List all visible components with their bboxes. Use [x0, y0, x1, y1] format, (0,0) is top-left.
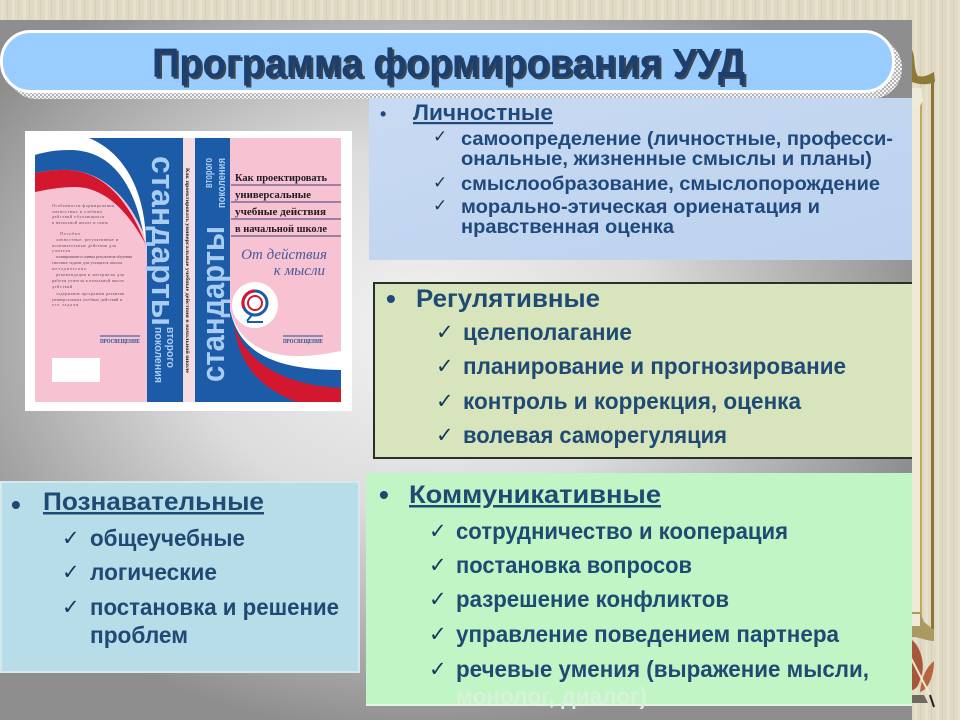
- panel: личностные: ✓: [433, 196, 447, 216]
- panel: регулятивные: •: [386, 283, 396, 314]
- front cover: универсальные: [235, 189, 311, 201]
- panel: познавательные: ✓: [62, 595, 80, 619]
- back cover: личностных и учебных: [52, 209, 102, 214]
- back cover: [35, 138, 147, 402]
- back cover: учителя: [52, 248, 70, 253]
- back cover: планирование и оценка результатов обучения: [56, 254, 132, 259]
- spines: поколения: [152, 327, 164, 383]
- icon: series logo: [232, 282, 278, 328]
- back cover: его задачи: [52, 302, 79, 307]
- spines: поколения: [216, 158, 228, 208]
- panel: регулятивные: волевая саморегуляция: [463, 422, 727, 448]
- panel: регулятивные: ✓: [436, 354, 454, 378]
- panel: познавательные: •: [11, 489, 21, 520]
- panel: регулятивные: целеполагание: [463, 319, 632, 345]
- back cover: Особенности формирования: [52, 203, 114, 208]
- book cover image: [25, 131, 352, 411]
- spines: Как проектировать универсальные учебные действия в начальной школе: [184, 168, 189, 374]
- back cover: типовые задачи для учащихся школы: [52, 260, 122, 265]
- panel: регулятивные: [373, 282, 912, 459]
- front cover: в начальной школе: [235, 223, 327, 235]
- panel: познавательные: Познавательные: [43, 488, 264, 516]
- panel: коммуникативные: постановка вопросов: [456, 552, 692, 578]
- back cover: универсальных учебных действий и: [52, 297, 123, 302]
- back cover: Пособие: [60, 231, 80, 236]
- spines: второго: [164, 327, 176, 368]
- panel: коммуникативные: разрешение конфликтов: [456, 586, 729, 612]
- panel: личностные: нравственная оценка: [461, 216, 674, 238]
- spines: второго: [203, 158, 215, 188]
- title: Программа формирования УУД: [154, 42, 747, 88]
- panel: регулятивные: Регулятивные: [416, 285, 600, 313]
- spines: стандарты: [195, 226, 231, 382]
- panel: личностные: морально-этическая ориенатация и: [461, 196, 820, 218]
- panel: познавательные: [1, 482, 359, 672]
- panel: личностные: [369, 98, 912, 260]
- panel: коммуникативные: Коммуникативные: [409, 481, 661, 509]
- panel: личностные: ✓: [433, 127, 447, 147]
- panel: познавательные: ✓: [62, 560, 80, 584]
- panel: коммуникативные: управление поведением партнера: [456, 621, 839, 647]
- panel: регулятивные: контроль и коррекция, оценка: [463, 388, 801, 414]
- back cover: содержание программы развития: [56, 291, 124, 296]
- panel: коммуникативные: ✓: [429, 519, 447, 543]
- panel: личностные: ✓: [433, 173, 447, 193]
- spines: [145, 138, 231, 402]
- back cover: рекомендации и материалы для: [56, 272, 124, 277]
- panel: коммуникативные: ✓: [429, 553, 447, 577]
- panel: коммуникативные: [366, 473, 912, 709]
- decorative gold frame: [912, 50, 935, 641]
- back cover: личностные, регулятивные и: [56, 237, 119, 243]
- front cover: к мысли: [274, 263, 325, 279]
- panel: коммуникативные: речевые умения (выражение мысли,: [456, 656, 869, 682]
- panel: познавательные: общеучебные: [90, 525, 245, 551]
- back cover: работы учителя в начальной школе: [52, 278, 124, 283]
- front cover: От действия: [241, 247, 327, 263]
- icon: autumn leaves and quill: [911, 640, 934, 707]
- back cover: действий обучающихся: [52, 214, 104, 219]
- title: Программа формирования УУД: [152, 40, 745, 86]
- panel: познавательные: ✓: [62, 526, 80, 550]
- panel: познавательные: логические: [90, 559, 217, 585]
- panel: коммуникативные: ✓: [429, 657, 447, 681]
- panel: личностные: •: [380, 104, 386, 124]
- front cover: ПРОСВЕЩЕНИЕ: [283, 339, 323, 345]
- panel: личностные: ональные, жизненные смыслы и планы): [461, 148, 872, 170]
- title banner: [2, 32, 902, 99]
- back cover: ПРОСВЕЩЕНИЕ: [100, 339, 140, 345]
- panel: личностные: самоопределение (личностные, професси-: [461, 128, 893, 150]
- back cover: познавательные действия для: [52, 243, 116, 248]
- panel: регулятивные: ✓: [436, 389, 454, 413]
- panel: коммуникативные: монолог, диалог): [456, 683, 647, 709]
- back cover: методические: [52, 266, 86, 271]
- panel: коммуникативные: •: [379, 479, 389, 510]
- panel: личностные: смыслообразование, смыслопорождение: [461, 173, 880, 195]
- front cover: [230, 138, 341, 402]
- panel: коммуникативные: ✓: [429, 622, 447, 646]
- panel: личностные: Личностные: [413, 100, 553, 125]
- panel: познавательные: постановка и решение: [90, 594, 339, 620]
- panel: регулятивные: планирование и прогнозирование: [463, 353, 846, 379]
- panel: регулятивные: ✓: [436, 423, 454, 447]
- panel: коммуникативные: ✓: [429, 587, 447, 611]
- front cover: Как проектировать: [235, 172, 327, 184]
- spines: стандарты: [145, 156, 181, 326]
- panel: познавательные: проблем: [90, 622, 188, 648]
- panel: регулятивные: ✓: [436, 320, 454, 344]
- back cover: в начальной школе и связь: [52, 220, 108, 225]
- front cover: учебные действия: [235, 206, 326, 218]
- panel: коммуникативные: сотрудничество и кооперация: [456, 518, 788, 544]
- back cover: действий: [52, 284, 73, 289]
